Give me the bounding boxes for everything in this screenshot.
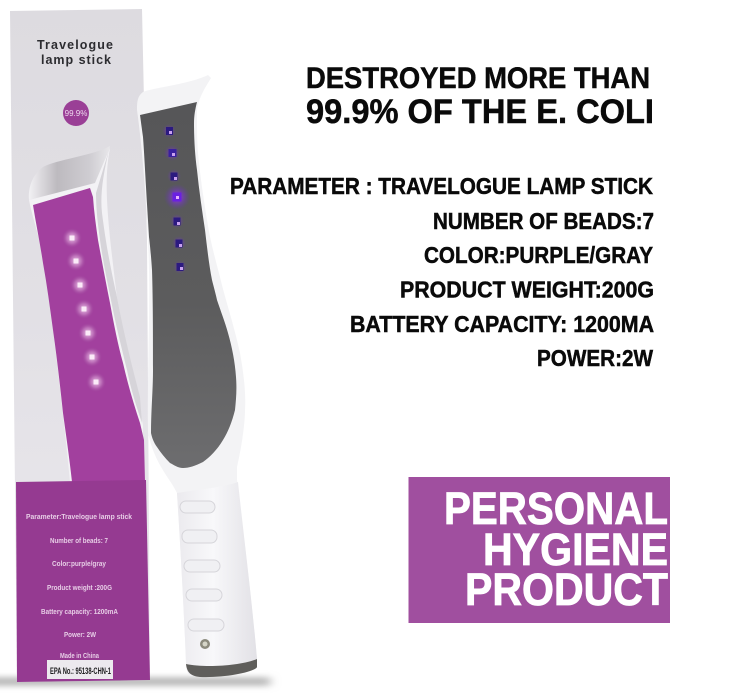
- box parameter text: Power: 2W: [64, 630, 97, 639]
- callout: personal hygiene product: PRODUCT: [465, 564, 668, 615]
- 99.9% badge: [63, 100, 89, 126]
- UV beads: [162, 124, 190, 274]
- handle: [177, 482, 257, 676]
- lit beads: [62, 228, 106, 392]
- parameter list: COLOR:PURPLE/GRAY: [424, 242, 653, 268]
- box parameter text: Battery capacity: 1200mA: [41, 607, 118, 616]
- parameter list: [230, 173, 654, 371]
- box parameter text: Number of beads: 7: [50, 536, 108, 545]
- parameter list: PARAMETER : TRAVELOGUE LAMP STICK: [230, 173, 653, 199]
- floor shadow: [0, 677, 270, 686]
- box title: [37, 38, 113, 67]
- box parameter text: Color:purple/gray: [52, 559, 107, 568]
- box parameter text: Parameter:Travelogue lamp stick: [26, 512, 133, 521]
- lamp stick product: [137, 75, 257, 677]
- box parameter text: [26, 512, 133, 660]
- end cap: [186, 659, 257, 677]
- callout: personal hygiene product: HYGIENE: [483, 524, 668, 575]
- side wall shade: [96, 150, 142, 423]
- screw: [200, 639, 210, 649]
- parameter list: NUMBER OF BEADS:7: [433, 208, 654, 234]
- headline: DESTROYED MORE THAN: [306, 62, 650, 95]
- white outline: [29, 148, 143, 482]
- headline: [306, 62, 654, 131]
- box title: Travelogue: [37, 38, 113, 52]
- grip grooves: [180, 501, 224, 631]
- 99.9% badge: 99.9%: [65, 109, 87, 118]
- EPA label: EPA No.: 95138-CHN-1: [50, 666, 111, 676]
- box face: [10, 9, 150, 682]
- callout: personal hygiene product: [408, 477, 670, 623]
- parameter list: BATTERY CAPACITY: 1200MA: [350, 311, 654, 337]
- callout: personal hygiene product: PERSONAL: [444, 483, 668, 534]
- purple parameter band: [16, 480, 150, 682]
- product box: [10, 9, 150, 682]
- box parameter text: Product weight :200G: [47, 583, 112, 592]
- gray panel: [140, 102, 236, 468]
- purple face: [33, 188, 145, 482]
- recess: [29, 146, 110, 200]
- stick body: [137, 75, 257, 676]
- EPA label: [47, 660, 113, 679]
- headline: 99.9% OF THE E. COLI: [306, 93, 654, 131]
- box parameter text: Made in China: [60, 651, 100, 660]
- box title: lamp stick: [41, 53, 111, 67]
- box image: lamp stick: [29, 146, 145, 482]
- parameter list: PRODUCT WEIGHT:200G: [400, 276, 654, 302]
- parameter list: POWER:2W: [537, 345, 653, 371]
